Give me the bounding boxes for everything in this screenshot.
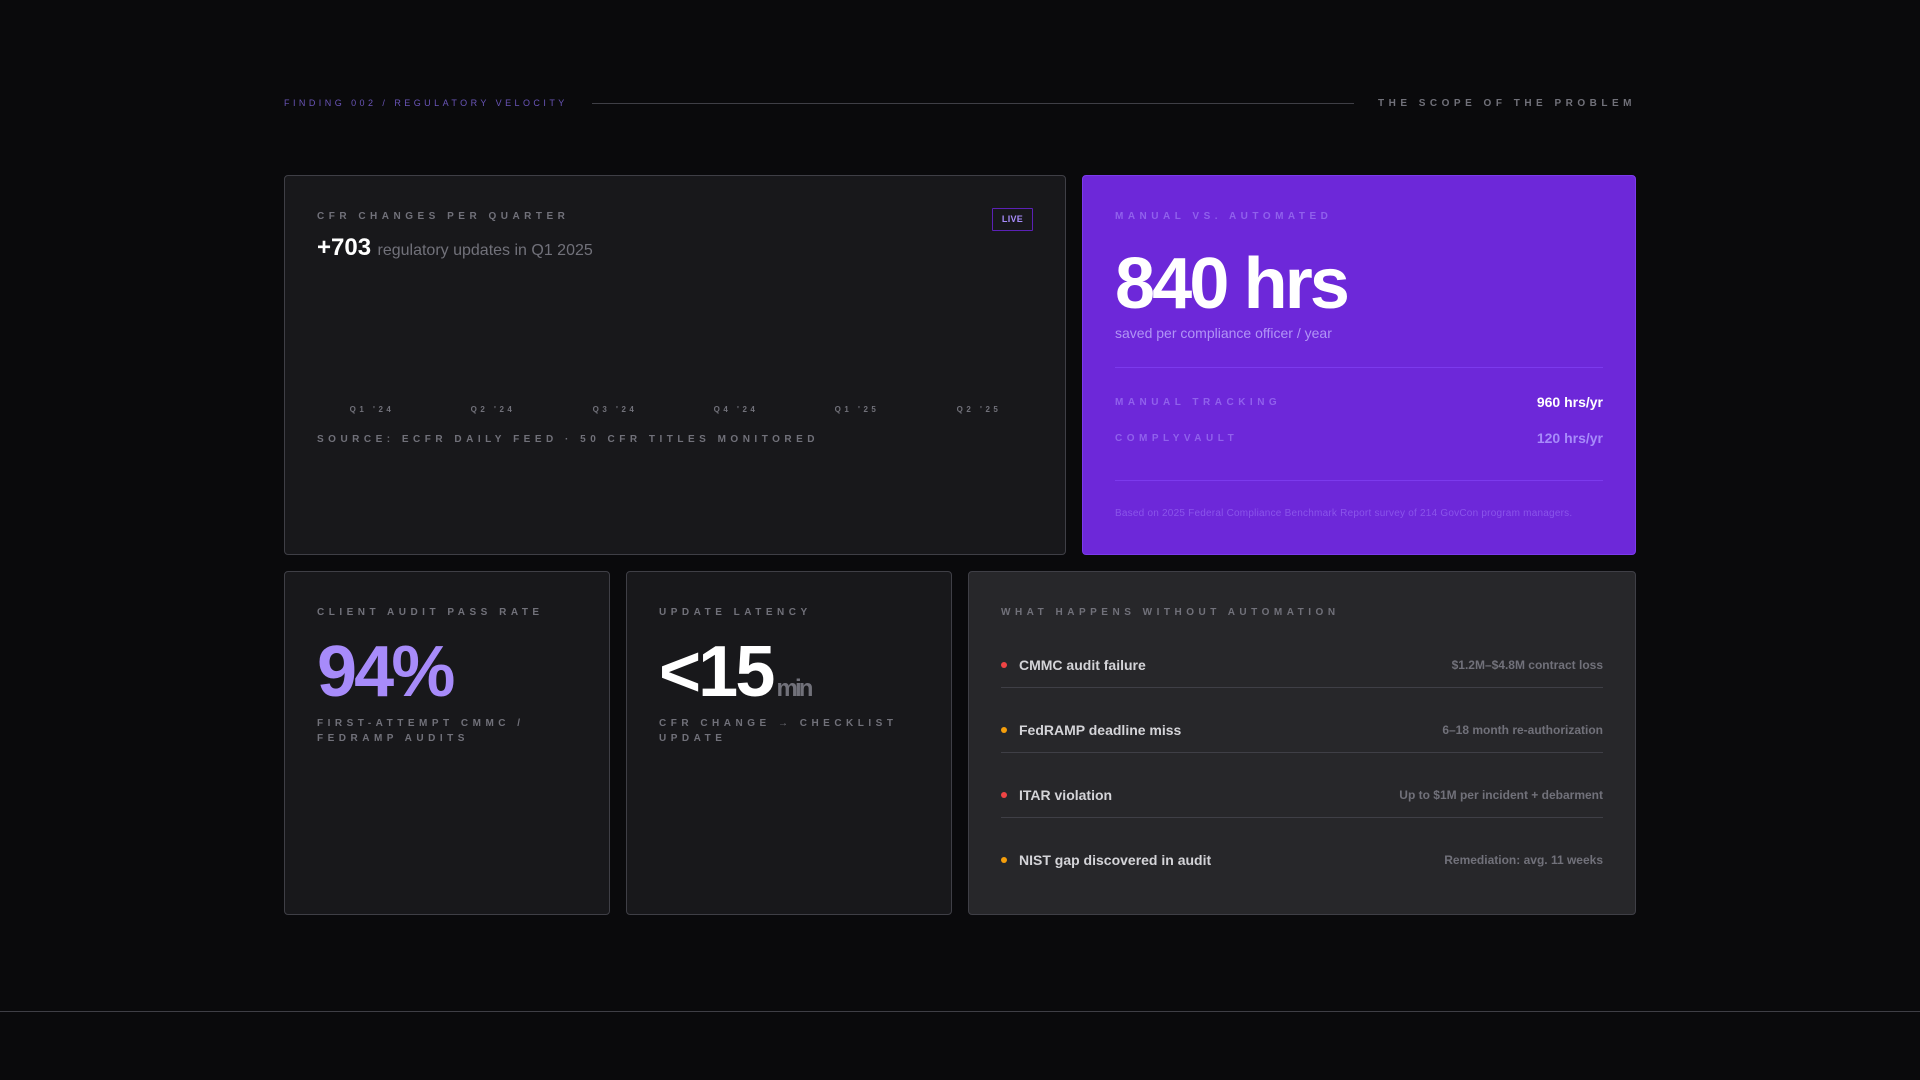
quarter axis labels: Q2 '25 <box>957 405 1001 414</box>
source note: SOURCE: ECFR DAILY FEED · 50 CFR TITLES MONITORED <box>317 434 819 445</box>
quarter axis labels: Q1 '24 <box>350 405 394 414</box>
panel: CFR changes per quarter <box>284 175 1066 555</box>
comparison row: manual tracking: MANUAL TRACKING <box>1115 397 1281 408</box>
panel: what happens without automation <box>968 571 1636 915</box>
footer rule <box>0 1011 1920 1012</box>
risk row: ITAR: ITAR violation <box>1019 787 1112 803</box>
quarter axis labels <box>350 405 1001 414</box>
risk row: FedRAMP: 6–18 month re-authorization <box>1442 723 1603 737</box>
header <box>284 98 1636 109</box>
risk row: ITAR <box>1001 776 1603 818</box>
divider <box>1115 367 1603 368</box>
big stat: 94% <box>317 632 452 712</box>
risk row: FedRAMP <box>1001 711 1603 753</box>
risk row: CMMC <box>1001 646 1603 688</box>
divider <box>1115 480 1603 481</box>
risk row: NIST: Remediation: avg. 11 weeks <box>1444 853 1603 867</box>
big stat: <15min <box>659 632 811 712</box>
panel: manual vs automated <box>1082 175 1636 555</box>
quarter axis labels: Q4 '24 <box>714 405 758 414</box>
live badge <box>992 208 1033 231</box>
footnote: Based on 2025 Federal Compliance Benchmark Report survey of 214 GovCon program managers. <box>1115 508 1572 519</box>
quarter axis labels: Q1 '25 <box>835 405 879 414</box>
comparison row: complyvault <box>1115 430 1603 446</box>
panel: update latency <box>626 571 952 915</box>
panel label: WHAT HAPPENS WITHOUT AUTOMATION <box>1001 607 1340 618</box>
risk row: NIST: NIST gap discovered in audit <box>1019 852 1211 868</box>
panel label: CLIENT AUDIT PASS RATE <box>317 607 544 618</box>
comparison row: complyvault: COMPLYVAULT <box>1115 433 1238 444</box>
risk row: CMMC: $1.2M–$4.8M contract loss <box>1452 658 1603 672</box>
stat caption: FEDRAMP AUDITS <box>317 733 469 744</box>
headline stat: +703 regulatory updates in Q1 2025 <box>317 234 593 261</box>
comparison row: complyvault: 120 hrs/yr <box>1537 430 1603 446</box>
stat caption: UPDATE <box>659 733 726 744</box>
risk row: NIST <box>1001 852 1603 868</box>
quarter axis labels: Q2 '24 <box>471 405 515 414</box>
header left label: FINDING 002 / REGULATORY VELOCITY <box>284 98 568 108</box>
big stat: 840 hrs <box>1115 244 1347 324</box>
stat caption <box>317 718 525 744</box>
stat caption: CFR CHANGE → CHECKLIST <box>659 718 897 729</box>
header rule <box>592 103 1354 104</box>
header right label: THE SCOPE OF THE PROBLEM <box>1378 98 1636 109</box>
panel label: CFR CHANGES PER QUARTER <box>317 211 569 222</box>
risk row: ITAR: Up to $1M per incident + debarment <box>1399 788 1603 802</box>
panel label: MANUAL VS. AUTOMATED <box>1115 211 1332 222</box>
panel label: UPDATE LATENCY <box>659 607 812 618</box>
quarter axis labels: Q3 '24 <box>593 405 637 414</box>
live badge: LIVE <box>1002 214 1023 224</box>
risk row: CMMC: CMMC audit failure <box>1019 657 1146 673</box>
stat caption: FIRST-ATTEMPT CMMC / <box>317 718 525 729</box>
comparison row: manual tracking: 960 hrs/yr <box>1537 394 1603 410</box>
stat caption: saved per compliance officer / year <box>1115 325 1332 341</box>
comparison row: manual tracking <box>1115 394 1603 410</box>
panel: client audit pass rate <box>284 571 610 915</box>
stat caption <box>659 718 897 744</box>
risk row: FedRAMP: FedRAMP deadline miss <box>1019 722 1181 738</box>
